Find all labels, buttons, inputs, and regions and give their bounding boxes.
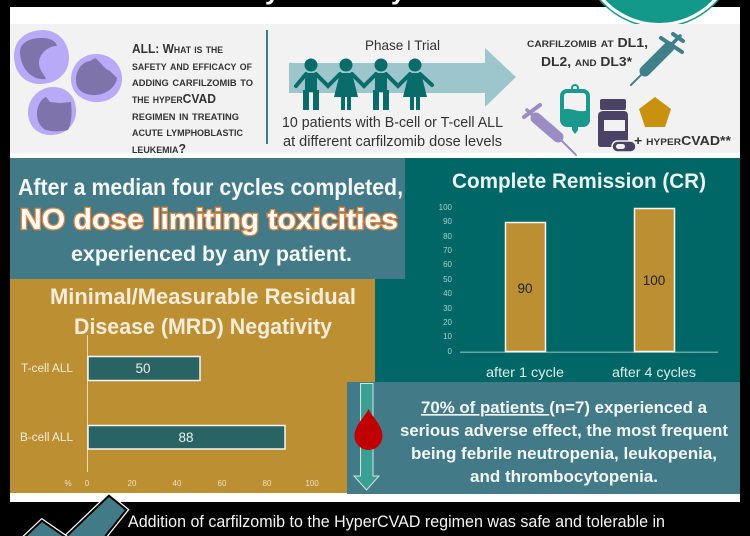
- panel: no dose limiting toxicities: experienced by any patient.: [71, 243, 352, 266]
- bar chart: complete remission: 50: [443, 275, 453, 284]
- bar chart: complete remission: 10: [443, 332, 453, 341]
- heading: complete remission: Complete Remission (CR): [452, 169, 706, 193]
- text: research question: safety and efficacy of: [132, 59, 252, 73]
- bar chart: complete remission: 100: [439, 203, 453, 212]
- text: phase I trial: Phase I Trial: [365, 37, 440, 53]
- bar chart: MRD negativity: 80: [263, 479, 272, 488]
- text: patient population: 10 patients with B-cell or T-cell ALL: [282, 114, 503, 131]
- text: carfilzomib dose levels: carfilzomib at DL1,: [527, 36, 648, 50]
- text: research question: ALL: What is the: [132, 42, 223, 56]
- bar chart: MRD negativity: %: [64, 479, 72, 488]
- bar chart: complete remission: 20: [443, 318, 453, 327]
- bar chart: MRD negativity: 20: [128, 479, 137, 488]
- bar chart: complete remission: 90: [517, 281, 533, 296]
- text: research question: [132, 42, 253, 156]
- icon: IV bag: [562, 85, 588, 134]
- top right badge circle: [581, 0, 737, 27]
- panel: adverse effects: [347, 382, 740, 494]
- text: patient population: [282, 114, 503, 150]
- callout: no dose limiting toxicities: NO dose limiting toxicities: [20, 204, 398, 236]
- bar chart: complete remission: after 4 cycles: [612, 364, 696, 380]
- title remnant: clipped heading descenders: [265, 0, 406, 5]
- icon: teal syringe: [631, 34, 683, 85]
- bar chart: complete remission: 80: [443, 232, 453, 241]
- icon: leukemia cells: [14, 30, 122, 135]
- bar chart: MRD negativity: 40: [173, 479, 182, 488]
- bar chart: complete remission: 60: [443, 260, 453, 269]
- icon: blood drop: [354, 409, 382, 450]
- text: research question: the hyperCVAD: [132, 92, 216, 106]
- text: research question: regimen in treating: [132, 109, 239, 123]
- bar chart: MRD negativity: [20, 335, 319, 488]
- panel: study question and design: [10, 24, 740, 156]
- bar chart: MRD negativity: T-cell ALL: [21, 363, 74, 375]
- bar chart: complete remission: after 1 cycle: [486, 364, 564, 380]
- icon: four patients holding hands: [296, 58, 432, 110]
- text: adverse effect summary: serious adverse effect, the most frequent: [400, 422, 729, 440]
- bar chart: complete remission: 70: [443, 246, 453, 255]
- text: adverse effect summary: [400, 399, 729, 486]
- text: conclusion: Addition of carfilzomib to the HyperCVAD regimen was safe and tolerable in: [128, 513, 665, 531]
- icon: purple syringe: [524, 105, 576, 155]
- panel: conclusion: [23, 497, 750, 536]
- text: adverse effect summary: being febrile neutropenia, leukopenia,: [411, 445, 717, 463]
- bar chart: complete remission: 90: [443, 217, 453, 226]
- bar chart: MRD negativity: 100: [305, 479, 319, 488]
- text: research question: acute lymphoblastic: [132, 125, 243, 139]
- arrow: trial progression: [289, 48, 516, 107]
- panel: no dose limiting toxicities: [10, 158, 405, 279]
- bar chart: complete remission: 0: [448, 347, 453, 356]
- bar chart: MRD negativity: 0: [85, 479, 90, 488]
- text: research question: adding carfilzomib to: [132, 75, 253, 89]
- panel: MRD negativity: [10, 279, 375, 493]
- bar chart: MRD negativity: 88: [178, 430, 194, 445]
- heading: MRD negativity: [50, 284, 356, 339]
- bar chart: complete remission: 40: [443, 289, 453, 298]
- text: patient population: at different carfilzomib dose levels: [283, 133, 502, 150]
- text: adverse effect summary: and thrombocytopenia.: [470, 468, 658, 486]
- panel: complete remission: [375, 158, 740, 382]
- text: plus hyperCVAD: + hyperCVAD**: [634, 134, 731, 148]
- bar chart: MRD negativity: B-cell ALL: [20, 432, 74, 444]
- text: carfilzomib dose levels: DL2, and DL3*: [541, 55, 632, 69]
- icon: checkmark: [23, 497, 125, 536]
- bar chart: complete remission: 100: [643, 273, 665, 288]
- bar chart: complete remission: 30: [443, 304, 453, 313]
- text: carfilzomib dose levels: [527, 36, 648, 69]
- text: adverse effect summary: 70% of patients (n=7) experienced a: [421, 399, 708, 417]
- panel: no dose limiting toxicities: After a median four cycles completed,: [18, 174, 403, 200]
- bar chart: MRD negativity: 60: [218, 479, 227, 488]
- text: research question: leukemia?: [132, 142, 186, 156]
- icon: gold pentagon: [639, 97, 671, 127]
- heading: MRD negativity: Disease (MRD) Negativity: [74, 314, 333, 339]
- bar chart: complete remission: [439, 203, 718, 380]
- bar chart: MRD negativity: 50: [135, 361, 151, 376]
- arrow: downward: [354, 384, 379, 490]
- heading: MRD negativity: Minimal/Measurable Residual: [50, 284, 356, 309]
- icon: pill bottle: [598, 99, 636, 152]
